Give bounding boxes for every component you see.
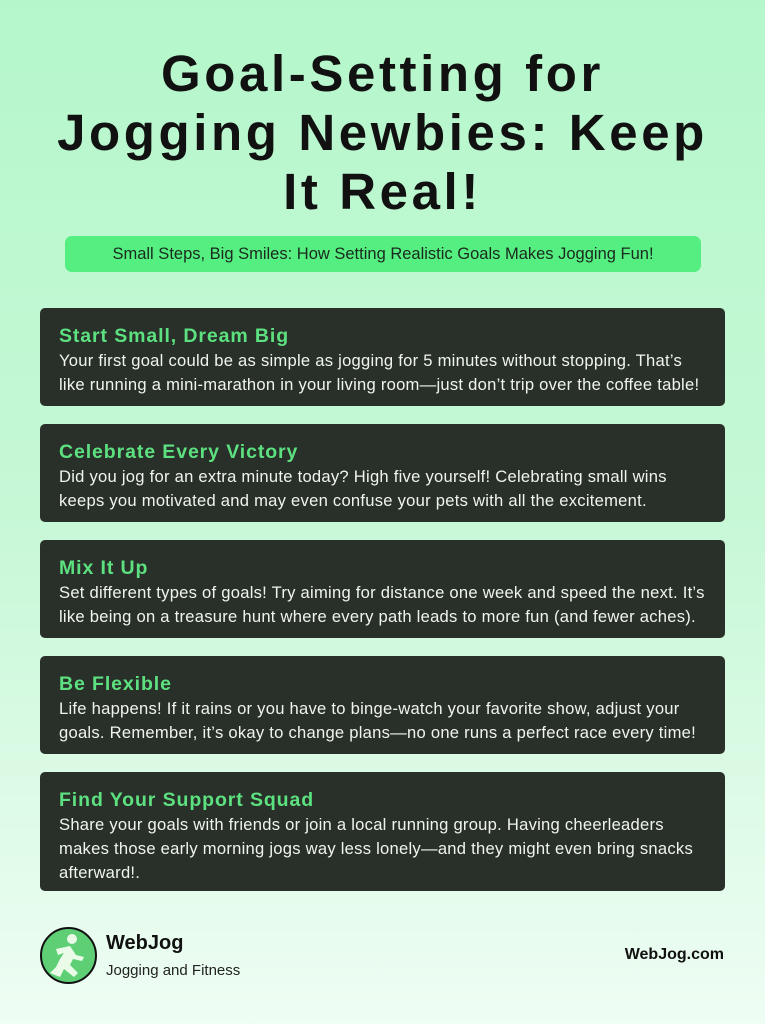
panel: support squad: makes those early morning jogs way less lonely—and they might even bring snacks [59,839,693,858]
panel: support squad: Share your goals with friends or join a local running group. Having cheerleaders [59,815,664,834]
website: WebJog.com [625,946,724,963]
title: Jogging Newbies: Keep [57,104,708,161]
panel: be flexible: Life happens! If it rains or you have to binge-watch your favorite show, adjust your [59,699,680,718]
title: It Real! [283,163,482,220]
title [57,45,708,220]
panel: support squad: Find Your Support Squad [59,789,314,811]
panel: support squad [40,772,725,891]
subtitle banner [65,236,701,272]
icon: logo runner [40,927,97,984]
panel: mix it up: Mix It Up [59,557,148,579]
panel: celebrate: Celebrate Every Victory [59,441,298,463]
panel: celebrate: Did you jog for an extra minute today? High five yourself! Celebrating small wins [59,467,667,486]
panel: celebrate: keeps you motivated and may even confuse your pets with all the excitement. [59,491,647,510]
panel: mix it up [40,540,725,638]
brand name: WebJog [106,932,183,954]
panel: start small: Start Small, Dream Big [59,325,289,347]
title: Goal-Setting for [161,45,604,102]
subtitle banner: Small Steps, Big Smiles: How Setting Realistic Goals Makes Jogging Fun! [112,245,654,263]
panel: start small [40,308,725,406]
panel: celebrate [40,424,725,522]
panel: mix it up: Set different types of goals! Try aiming for distance one week and speed the next. It’s [59,583,705,602]
panel: start small: Your first goal could be as simple as jogging for 5 minutes without stopping. That’s [59,351,682,370]
panel: start small: like running a mini-marathon in your living room—just don’t trip over the coffee table! [59,375,699,394]
panel: support squad: afterward!. [59,863,140,882]
panel: be flexible: Be Flexible [59,673,172,695]
panel: be flexible [40,656,725,754]
panel: mix it up: like being on a treasure hunt where every path leads to more fun (and fewer aches). [59,607,696,626]
panel: be flexible: goals. Remember, it’s okay to change plans—no one runs a perfect race every time! [59,723,696,742]
brand tagline: Jogging and Fitness [106,962,240,979]
